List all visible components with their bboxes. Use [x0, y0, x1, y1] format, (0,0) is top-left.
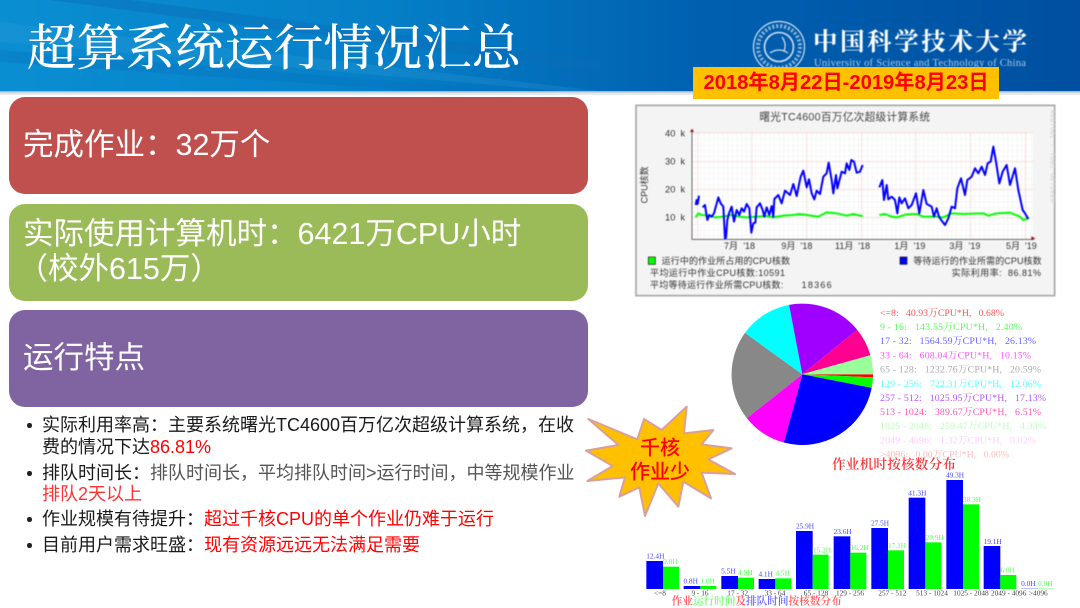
- queue time value labels: 1.0H: [700, 577, 716, 586]
- category labels: 257 - 512: [878, 589, 907, 598]
- x axis labels: [724, 241, 1037, 251]
- icon: university seal: [754, 22, 804, 72]
- bullet list: 排队时间长：排队时间长，平均排队时间>运行时间，中等规模作业: [42, 463, 575, 483]
- pie legend: 9 - 16: 143.55万CPU*H, 2.40%: [880, 321, 1022, 333]
- pie legend: 2049 - 4096: 1.32万CPU*H, 0.02%: [880, 434, 1036, 446]
- queue time value labels: 4.5H: [775, 569, 791, 578]
- run time value labels: 5.5H: [721, 566, 736, 575]
- date range badge: [693, 67, 999, 99]
- chart legend: 等待运行的作业所需的CPU核数: [913, 255, 1042, 266]
- x axis labels: '18: [858, 241, 870, 251]
- y axis labels: 10 k: [665, 213, 686, 223]
- pie legend: <=8: 40.93万CPU*H, 0.68%: [880, 307, 1004, 319]
- starburst callout: 作业少: [630, 461, 690, 484]
- x axis labels: '19: [969, 241, 980, 251]
- queue time value labels: 17.1H: [888, 541, 907, 550]
- logo: university of science and technology of china: [752, 20, 1027, 69]
- queue time value labels: 15.2H: [813, 545, 832, 554]
- x axis labels: '18: [743, 241, 755, 251]
- pie legend: 513 - 1024: 389.67万CPU*H, 6.51%: [880, 406, 1041, 418]
- queue time value labels: 9.8H: [663, 557, 678, 566]
- bullet list: [27, 415, 575, 555]
- category labels: >4096: [1029, 589, 1048, 598]
- x axis labels: '19: [914, 241, 925, 251]
- bar chart: run time and queue time by core count: [646, 471, 1054, 608]
- starburst callout: 千核: [640, 436, 680, 459]
- category labels: 17 - 32: [727, 589, 748, 598]
- pie legend: 33 - 64: 608.04万CPU*H, 10.15%: [880, 350, 1031, 362]
- bullet list: 作业规模有待提升：超过千核CPU的单个作业仍难于运行: [42, 509, 494, 529]
- run time bars: [646, 480, 1038, 589]
- panel: operating features: [9, 310, 588, 407]
- category labels: [654, 589, 1048, 598]
- bullet list: 排队2天以上: [42, 484, 142, 504]
- run time value labels: 49.3H: [946, 471, 965, 480]
- x axis labels: 11月: [835, 241, 853, 251]
- line chart: TC4600 cpu usage: [634, 104, 1056, 297]
- queue time value labels: 38.3H: [963, 495, 982, 504]
- panel: machine hours: 实际使用计算机时：6421万CPU小时: [23, 217, 521, 251]
- pie legend: 257 - 512: 1025.95万CPU*H, 17.13%: [880, 392, 1046, 404]
- run time value labels: 4.1H: [758, 570, 774, 579]
- x axis labels: 9月: [781, 241, 795, 251]
- chart legend: 18366: [802, 280, 832, 290]
- pie legend: 17 - 32: 1564.59万CPU*H, 26.13%: [880, 335, 1036, 347]
- chart legend: 实际利用率: 86.81%: [952, 267, 1041, 278]
- x axis labels: 1月: [894, 241, 908, 251]
- queue time bars: [663, 504, 1054, 589]
- category labels: 2049 - 4096: [991, 589, 1027, 598]
- logo english name: University of Science and Technology of China: [814, 58, 1026, 69]
- panel: completed jobs: 完成作业：32万个: [23, 128, 270, 162]
- run time value labels: 0.8H: [683, 576, 699, 585]
- header banner: [0, 0, 1080, 95]
- line chart: TC4600 cpu usage: CPU核数: [638, 166, 649, 203]
- run time value labels: 41.3H: [908, 488, 927, 497]
- x axis labels: 5月: [1006, 241, 1020, 251]
- panel: completed jobs: [9, 97, 588, 194]
- run time value labels: [646, 471, 1036, 588]
- logo chinese name: 中国科学技术大学: [813, 23, 1027, 58]
- green series: [696, 212, 1028, 220]
- chart legend: 平均等待运行作业所需CPU核数:: [650, 279, 783, 290]
- title: 超算系统运行情况汇总: [27, 9, 523, 80]
- pie chart: machine hours by core count: [732, 304, 873, 445]
- chart legend: 平均运行中作业CPU核数:10591: [650, 267, 785, 278]
- starburst callout: [585, 406, 736, 517]
- chart legend: 运行中的作业所占用的CPU核数: [662, 255, 790, 266]
- pie legend: 1025 - 2048: 259.47万CPU*H, 4.33%: [880, 420, 1046, 432]
- queue time value labels: 16.2H: [851, 543, 869, 552]
- category labels: 33 - 64: [765, 589, 786, 598]
- bullet list: 费的情况下达86.81%: [42, 437, 211, 457]
- blue series: [696, 147, 1028, 238]
- x axis labels: '19: [1025, 241, 1037, 251]
- pie legend: 129 - 256: 722.31万CPU*H, 12.06%: [880, 378, 1041, 390]
- category labels: 513 - 1024: [916, 589, 948, 598]
- date range badge: 2018年8月22日-2019年8月23日: [703, 72, 989, 94]
- queue time value labels: [663, 495, 1053, 588]
- panel: machine hours: （校外615万）: [17, 252, 221, 286]
- run time value labels: 27.5H: [871, 519, 890, 528]
- y axis labels: 20 k: [665, 185, 686, 195]
- queue time value labels: 0.0H: [1038, 579, 1053, 588]
- y axis labels: [665, 129, 686, 223]
- category labels: <=8: [654, 589, 666, 598]
- run time value labels: 23.6H: [834, 527, 852, 536]
- x axis labels: 3月: [949, 241, 963, 251]
- x axis labels: '18: [801, 241, 812, 251]
- queue time value labels: 6.0H: [1000, 565, 1016, 574]
- pie legend: [880, 307, 1046, 460]
- x axis labels: 7月: [724, 241, 738, 251]
- run time value labels: 12.4H: [646, 551, 665, 560]
- pie legend: 65 - 128: 1232.76万CPU*H, 20.59%: [880, 364, 1041, 376]
- category labels: 9 - 16: [691, 589, 709, 598]
- category labels: 65 - 128: [804, 589, 829, 598]
- bullet list: 目前用户需求旺盛：现有资源远远无法满足需要: [42, 535, 420, 555]
- panel: operating features: 运行特点: [23, 341, 145, 375]
- chart legend: [648, 255, 1042, 290]
- panel: machine hours: [9, 204, 588, 301]
- y axis labels: 30 k: [665, 157, 686, 167]
- category labels: 1025 - 2048: [953, 589, 989, 598]
- queue time value labels: 20.9H: [926, 533, 944, 542]
- queue time value labels: 4.9H: [738, 568, 753, 577]
- run time value labels: 19.1H: [984, 537, 1002, 546]
- line chart: TC4600 cpu usage: RRDTOOL / TOBI OETIKER: [1049, 110, 1056, 203]
- category labels: 129 - 256: [836, 589, 864, 598]
- run time value labels: 0.0H: [1021, 579, 1036, 588]
- run time value labels: 25.9H: [796, 522, 815, 531]
- y axis labels: 40 k: [665, 129, 686, 139]
- chart title: 曙光TC4600百万亿次超级计算系统: [759, 110, 930, 123]
- bullet list: 实际利用率高：主要系统曙光TC4600百万亿次超级计算系统，在收: [42, 415, 574, 435]
